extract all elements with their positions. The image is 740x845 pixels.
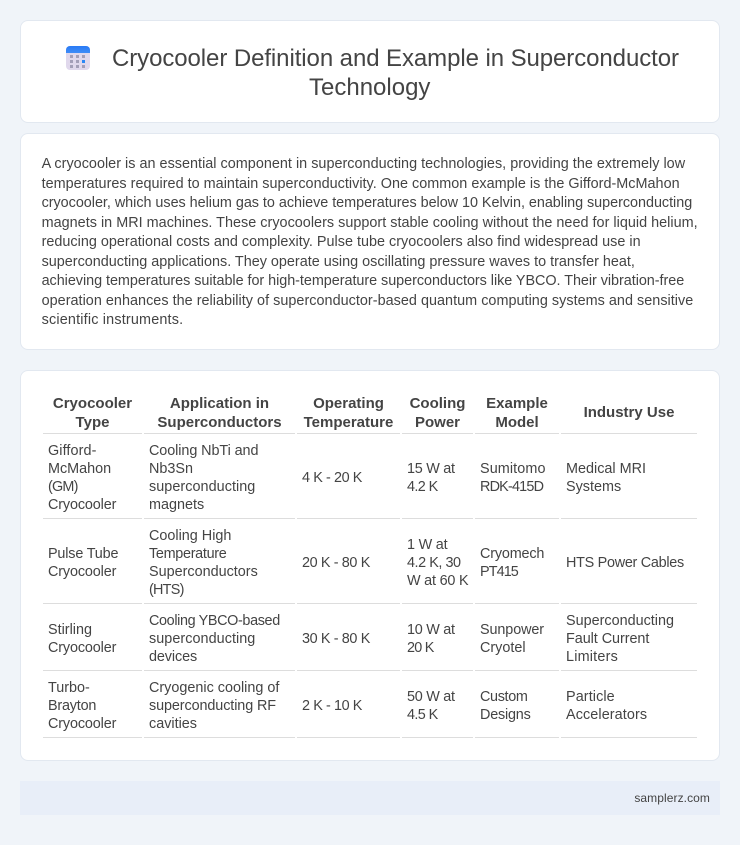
table: Temperature bbox=[149, 546, 226, 562]
table: cavities bbox=[149, 716, 197, 732]
table: Designs bbox=[480, 707, 531, 723]
row: Pulse Tube bbox=[48, 528, 684, 598]
table: Industry Use bbox=[584, 404, 674, 421]
table: 4 K - 20 K bbox=[302, 470, 362, 486]
table: Fault Current bbox=[566, 631, 649, 647]
description text: reducing operational costs and complexity. Pulse tube cryocoolers also find widespread use in bbox=[42, 234, 641, 250]
table: Accelerators bbox=[566, 707, 647, 723]
table: Pulse Tube bbox=[48, 546, 118, 562]
table: 20 K - 80 K bbox=[302, 555, 370, 571]
table: 4.5 K bbox=[407, 707, 438, 723]
table panel bbox=[20, 370, 720, 761]
description text: achieving temperatures suitable for high-temperature superconductors like YBCO. Their vibration-free bbox=[42, 273, 684, 289]
table: 15 W at bbox=[407, 461, 455, 477]
table header bbox=[53, 395, 674, 431]
table: Cryotel bbox=[480, 640, 526, 656]
table: Sumitomo bbox=[480, 461, 546, 477]
table: HTS Power Cables bbox=[566, 555, 684, 571]
table: Brayton bbox=[48, 698, 96, 714]
table: Model bbox=[495, 414, 539, 431]
table: McMahon bbox=[48, 461, 111, 477]
row: Gifford-McMahon bbox=[48, 443, 646, 513]
title: Cryocooler Definition and Example in Superconductor bbox=[112, 45, 679, 72]
table: Custom bbox=[480, 689, 527, 705]
description panel bbox=[20, 133, 720, 350]
table: Medical MRI bbox=[566, 461, 646, 477]
table: 2 K - 10 K bbox=[302, 698, 362, 714]
table: Stirling bbox=[48, 622, 92, 638]
table: Temperature bbox=[304, 414, 393, 431]
description text: cryocooler, which uses helium gas to achieve temperatures below 10 Kelvin, enabling superconducting bbox=[42, 195, 692, 211]
table: RDK-415D bbox=[480, 479, 543, 495]
table: Example bbox=[486, 395, 548, 412]
table: PT415 bbox=[480, 564, 518, 580]
description text bbox=[42, 156, 698, 328]
table: Cryocooler bbox=[53, 395, 132, 412]
table: 30 K - 80 K bbox=[302, 631, 370, 647]
table: Cooling NbTi and bbox=[149, 443, 258, 459]
footer text: samplerz.com bbox=[634, 791, 710, 805]
table: superconducting RF bbox=[149, 698, 276, 714]
table: Cryocooler bbox=[48, 640, 116, 656]
description text: temperatures required to maintain superconductivity. One common example is the Gifford-McMahon bbox=[42, 176, 680, 192]
title: Technology bbox=[309, 74, 430, 101]
table: devices bbox=[149, 649, 197, 665]
table: Power bbox=[415, 414, 460, 431]
table: Cooling YBCO-based bbox=[149, 613, 280, 629]
description text: superconducting applications. They operate using oscillating pressure waves to transfer heat, bbox=[42, 254, 635, 270]
table: (HTS) bbox=[149, 582, 184, 598]
table: 1 W at bbox=[407, 537, 447, 553]
table: (GM) bbox=[48, 479, 78, 495]
table: 50 W at bbox=[407, 689, 455, 705]
description text: magnets in MRI machines. These cryocoolers support stable cooling without the need for liquid helium, bbox=[42, 214, 698, 230]
table: Cryocooler bbox=[48, 497, 116, 513]
table: Limiters bbox=[566, 649, 618, 665]
table: Application in bbox=[170, 395, 269, 412]
title bbox=[112, 45, 679, 101]
table: W at 60 K bbox=[407, 573, 468, 589]
table: Gifford- bbox=[48, 443, 97, 459]
footer bar bbox=[20, 781, 720, 815]
table: Cryogenic cooling of bbox=[149, 680, 279, 696]
table: 10 W at bbox=[407, 622, 455, 638]
table: Sunpower bbox=[480, 622, 544, 638]
description text: scientific instruments. bbox=[42, 312, 183, 328]
table: Cryocooler bbox=[48, 716, 116, 732]
table: Superconducting bbox=[566, 613, 674, 629]
header card bbox=[20, 20, 720, 123]
icon: calendar bbox=[66, 46, 90, 70]
table: Cryomech bbox=[480, 546, 544, 562]
table: Superconductors bbox=[149, 564, 258, 580]
table: Systems bbox=[566, 479, 621, 495]
table: Operating bbox=[313, 395, 384, 412]
table: Superconductors bbox=[157, 414, 282, 431]
table: Turbo- bbox=[48, 680, 90, 696]
table: magnets bbox=[149, 497, 204, 513]
table: Nb3Sn bbox=[149, 461, 193, 477]
table: superconducting bbox=[149, 631, 255, 647]
row: Stirling bbox=[48, 613, 674, 665]
table: superconducting bbox=[149, 479, 255, 495]
table: 4.2 K, 30 bbox=[407, 555, 461, 571]
table: 20 K bbox=[407, 640, 434, 656]
table: Cooling High bbox=[149, 528, 231, 544]
row: Turbo-Brayton bbox=[48, 680, 647, 732]
description text: operation enhances the reliability of superconductor-based quantum computing systems and sensitive bbox=[42, 292, 693, 308]
description text: A cryocooler is an essential component in superconducting technologies, providing the extremely low bbox=[42, 156, 685, 172]
table: Cooling bbox=[410, 395, 465, 412]
table: 4.2 K bbox=[407, 479, 438, 495]
table: Cryocooler bbox=[48, 564, 116, 580]
table: Type bbox=[76, 414, 109, 431]
table: Particle bbox=[566, 689, 615, 705]
